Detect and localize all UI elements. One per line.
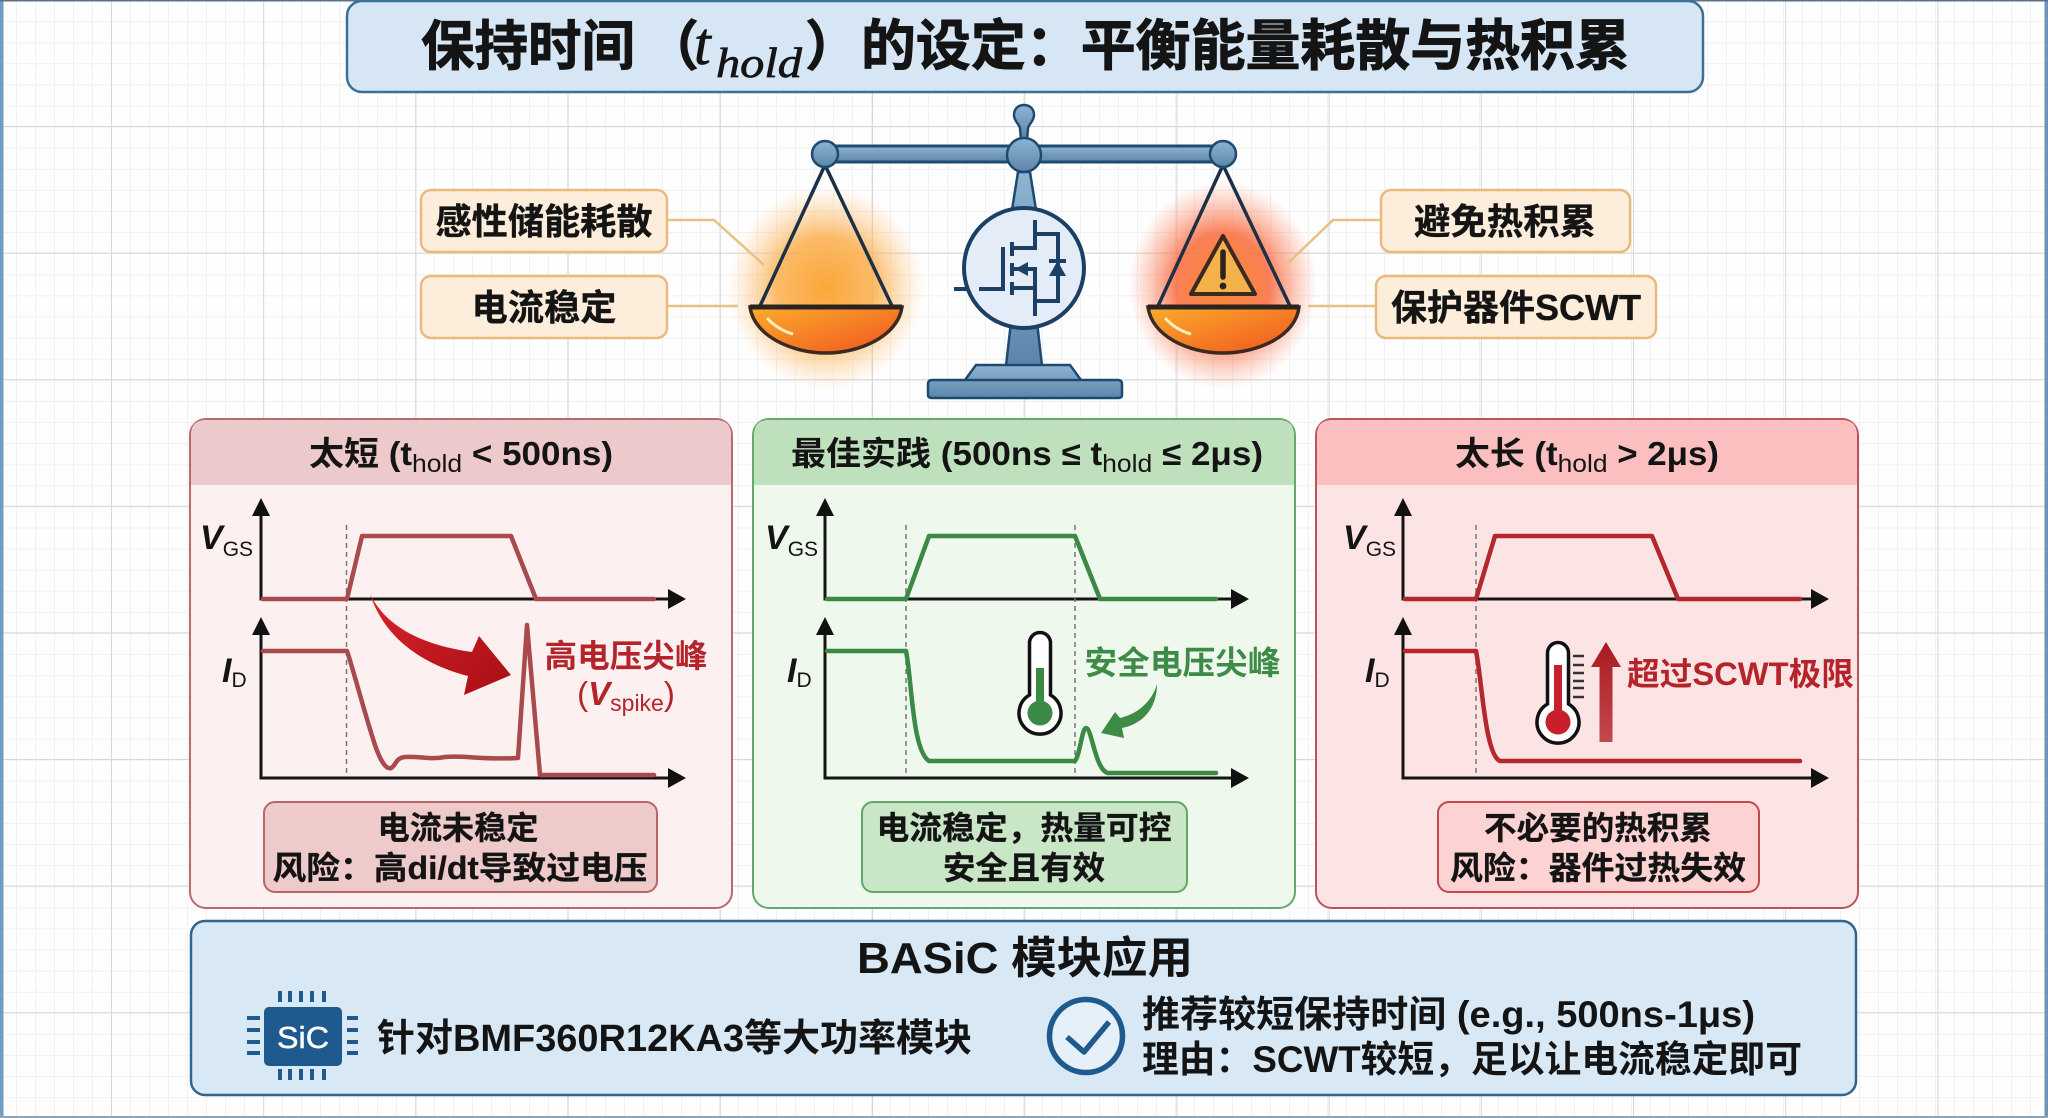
spike label: spike [610,690,664,716]
chart: VGS and ID waveforms: V [200,519,223,557]
label: current stable: 电流稳定 [472,287,616,328]
spike label: (V [577,675,610,712]
title: hold [716,41,803,87]
chart: VGS and ID waveforms: GS [1366,538,1396,561]
icon: thermometer [1019,632,1061,734]
icon: SiC chip [247,991,358,1080]
chart: VGS and ID waveforms: I [222,652,231,690]
panel header: hold [412,450,462,478]
balance scale [728,105,1317,398]
chart: VGS and ID waveforms [765,498,1249,788]
chart: VGS and ID waveforms: V [765,519,788,557]
panel header [754,420,1294,485]
arrow: to spike [370,594,511,695]
module text: 针对BMF360R12KA3等大功率模块 [377,1018,972,1060]
left pan [750,307,902,353]
icon: thermometer hot [1537,642,1584,743]
chart: VGS and ID waveforms: I [787,652,796,690]
panel header: 太短 (t [309,435,406,472]
left heat glow [728,186,924,390]
callout: 电流未稳定 [378,810,538,846]
chart: VGS and ID waveforms [200,498,686,788]
icon: SiC chip: SiC [277,1020,329,1055]
scale column [1006,172,1042,366]
scale beam [824,146,1223,162]
right heat glow [1129,181,1317,389]
panel header: hold [1558,450,1608,478]
right pan with warning [1148,236,1299,353]
title: 保持时间 [421,17,635,77]
panel: too short [190,419,732,908]
panel: best practice [753,419,1295,908]
scale strings left [760,165,892,306]
label: avoid heat [1381,190,1630,252]
label: inductive energy: 感性储能耗散 [436,201,652,242]
chart: VGS and ID waveforms [1343,498,1829,788]
icon: check circle [1050,1000,1122,1072]
scale base [928,365,1122,398]
label: avoid heat: 避免热积累 [1414,201,1596,242]
recommendation text: 推荐较短保持时间 (e.g., 500ns-1μs) [1142,994,1755,1035]
connector lines [667,220,1381,306]
label: protect SCWT: 保护器件SCWT [1391,287,1641,328]
icon: warning triangle [1191,236,1255,294]
exceed label: 超过SCWT极限 [1627,656,1854,692]
title [347,1,1703,92]
chart: VGS and ID waveforms: D [796,669,812,692]
chart: VGS and ID waveforms: I [1365,652,1374,690]
title: ） [805,17,859,77]
label: inductive energy [421,190,667,252]
recommendation text: 理由：SCWT较短，足以让电流稳定即可 [1142,1039,1802,1080]
title: 的设定：平衡能量耗散与热积累 [861,15,1630,77]
callout [264,802,657,892]
callout: 风险：器件过热失效 [1450,850,1746,886]
scale post top knob [1014,105,1034,140]
callout [862,802,1187,892]
panel header: 太长 (t [1455,435,1552,472]
panel: too long [1316,419,1858,908]
recommendation text [1142,994,1802,1080]
label: protect SCWT [1376,276,1656,338]
panel header: hold [1102,450,1152,478]
panel header: > 2μs) [1608,435,1719,472]
panel header: 最佳实践 (500ns ≤ t [791,435,1084,472]
label: current stable [421,276,667,338]
spike label [544,638,708,716]
callout: 安全且有效 [943,850,1105,886]
scale pivot [1007,138,1041,172]
title: t [694,11,712,77]
panel header [191,420,731,485]
spike label: 高电压尖峰 [544,638,708,674]
panel header: < 500ns) [462,435,613,472]
chart: VGS and ID waveforms: GS [223,538,253,561]
title: （ [645,17,699,77]
callout: 电流稳定，热量可控 [876,810,1172,846]
callout [1438,802,1759,892]
scale strings right [1158,165,1290,306]
arrow: to spike [1101,684,1157,738]
arrow: temperature up [1591,642,1621,742]
chart: VGS and ID waveforms: D [231,669,247,692]
callout: 风险：高di/dt导致过电压 [272,850,648,886]
spike label: 安全电压尖峰 [1084,645,1280,681]
panel heading: BASiC 模块应用 [857,934,1193,983]
chart: VGS and ID waveforms: V [1343,519,1366,557]
callout: 不必要的热积累 [1484,810,1712,846]
spike label: ) [664,675,675,712]
panel header: ≤ 2μs) [1152,435,1263,472]
chart: VGS and ID waveforms: D [1374,669,1390,692]
chart: VGS and ID waveforms: GS [788,538,818,561]
panel header [1317,420,1857,485]
panel: BASiC module application [191,921,1856,1095]
MOSFET symbol [954,208,1084,328]
